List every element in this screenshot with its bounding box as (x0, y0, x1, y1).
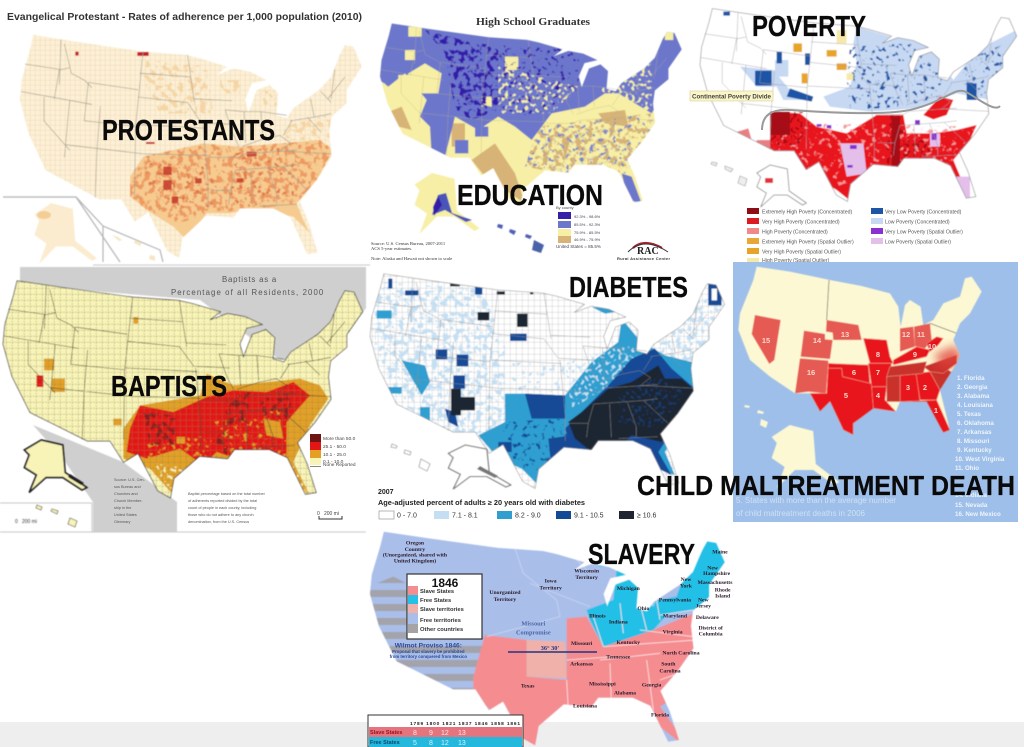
state ranking list: 8. Missouri (957, 438, 990, 445)
state ranking list: 9. Kentucky (957, 447, 992, 454)
note: right text block: denomination, from the U.S. Census (188, 520, 249, 524)
state ranking list: 4. Louisiana (957, 402, 993, 409)
map labels: Virginia (663, 629, 683, 635)
panel: baptists (0, 265, 370, 532)
state rank numbers: 13 (841, 330, 849, 339)
state rank numbers: 15 (762, 336, 770, 345)
map labels: Missouri (521, 620, 546, 627)
legend: diabetes classes: ≥ 10.6 (637, 512, 657, 520)
legend: education quartiles: United States = 85.5% (556, 244, 601, 249)
map labels: Territory (575, 575, 598, 581)
table: state counts by year: 12 (441, 740, 449, 747)
map labels: Michigan (617, 586, 641, 592)
legend: baptist percentages: 25.1 - 50.0 (323, 444, 346, 450)
map labels: New (698, 598, 710, 604)
state rank numbers: 11 (917, 330, 925, 339)
state rank numbers: 12 (902, 330, 910, 339)
note: right text block: those who do not adhere to any church (188, 513, 254, 517)
state rank numbers: 5 (844, 391, 848, 400)
legend: education quartiles: By county (556, 205, 574, 210)
label: education: EDUCATION (457, 180, 603, 212)
note: wilmot proviso: from territory conquered from Mexico (390, 654, 467, 659)
note: left text block (114, 478, 146, 524)
legend: poverty categories: Extremely High Poverty (Concentrated) (762, 210, 853, 216)
map labels: New (681, 577, 692, 583)
note: left text block: ship in the (114, 506, 131, 510)
table: state counts by year: 9 (429, 730, 433, 737)
map labels: Hampshire (703, 571, 731, 577)
label: slavery: SLAVERY (588, 539, 695, 571)
legend: poverty categories: Very Low Poverty (Spatial Outlier) (885, 230, 963, 236)
map labels: Alabama (614, 690, 636, 696)
map labels: Indiana (609, 619, 628, 625)
map labels: Country (405, 547, 425, 553)
line: missouri compromise 36 30 (508, 651, 597, 653)
legend: 1846: 1846 (432, 576, 459, 590)
note: left text block: Churches and (114, 492, 138, 496)
table: state counts by year: Slave States (370, 730, 402, 736)
map title: baptists as a percentage: Baptists as a (222, 275, 277, 284)
note: left text block: sus Bureau and (114, 485, 141, 489)
note: wilmot proviso: Proposal that slavery be prohibited (392, 649, 465, 654)
inset: alaska and hawaii (391, 444, 511, 489)
map labels: Compromise (516, 629, 551, 636)
caption: of child maltreatment deaths in 2006 (736, 509, 866, 518)
map: baptists percentage (2, 280, 364, 499)
map labels: Tennessee (606, 655, 631, 661)
legend: diabetes classes (379, 511, 657, 520)
legend: poverty categories: Extremely High Poverty (Spatial Outlier) (762, 240, 854, 246)
map title: baptists as a percentage: Percentage of all Residents, 2000 (171, 288, 324, 297)
legend: baptist percentages: 0.1 - 10.0 (323, 459, 344, 465)
map labels: North Carolina (662, 650, 700, 656)
scale bar: 0 200 mi (317, 511, 339, 517)
state ranking list: 3. Alabama (957, 393, 990, 400)
state rank numbers: 1 (934, 406, 938, 415)
state ranking list: 5. Texas (957, 411, 982, 418)
map labels: New (707, 566, 719, 572)
map labels: Delaware (696, 615, 719, 621)
table: state counts by year: 8 (429, 740, 433, 747)
map labels: Ohio (637, 606, 649, 612)
logo: rural assistance center: Rural Assistance Center (617, 256, 670, 261)
legend: poverty categories: Very High Poverty (Spatial Outlier) (762, 250, 841, 256)
logo: rural assistance center (617, 243, 670, 261)
map labels: Kentucky (617, 640, 640, 646)
legend: year: 2007 (378, 489, 394, 496)
note: right text block: of adherents reported divided by the total (188, 499, 257, 503)
map labels: Georgia (642, 683, 662, 689)
map: diabetes prevalence (365, 265, 730, 495)
state ranking list: 11. Ohio (955, 465, 979, 472)
map title: high school graduates: High School Graduates (476, 17, 590, 28)
map labels: Wisconsin (574, 568, 600, 574)
legend: 1846: Slave territories (420, 607, 464, 613)
map: high school graduates (375, 20, 688, 205)
table: state counts by year (368, 715, 523, 747)
map: child maltreatment (738, 267, 982, 435)
table: state counts by year: 1789 1800 1821 1837 1846 1858 1861 (410, 721, 520, 727)
state rank numbers: 16 (807, 368, 815, 377)
label: protestants: PROTESTANTS (102, 115, 275, 147)
legend: 1846: Free territories (420, 618, 461, 624)
legend: 1846: Free States (420, 598, 451, 604)
map labels: South (661, 662, 676, 668)
state rank numbers: 3 (906, 383, 910, 392)
state rank numbers: 6 (852, 368, 856, 377)
state ranking list: 7. Arkansas (957, 429, 992, 436)
bottom grey strip (0, 722, 1024, 747)
state rank numbers: 14 (813, 336, 822, 345)
legend: poverty categories: Very Low Poverty (Concentrated) (885, 210, 962, 216)
legend: education quartiles: 85.5% - 92.3% (574, 222, 601, 227)
inset: alaska and hawaii (711, 162, 806, 207)
map labels: Florida (651, 712, 669, 718)
legend: baptist percentages: None Reported (323, 462, 356, 468)
map labels: Massachusetts (698, 580, 733, 586)
legend: education quartiles: 75.9% - 85.5% (574, 230, 601, 235)
state rank numbers: 10 (928, 342, 936, 351)
inset: alaska and hawaii (3, 197, 163, 264)
note: wilmot proviso: Wilmot Proviso 1846: (395, 642, 462, 649)
label: diabetes: DIABETES (569, 272, 688, 304)
note: right text block: count of people in each county, including (188, 506, 256, 510)
panel: education (371, 17, 688, 261)
legend: education quartiles: 92.3% - 98.6% (574, 214, 601, 219)
legend: baptist percentages (310, 434, 356, 468)
legend: diabetes classes: 9.1 - 10.5 (574, 512, 604, 520)
panel: protestants (0, 12, 370, 265)
note: left text block: Source: U.S. Cen- (114, 478, 146, 482)
state ranking list: 15. Nevada (955, 502, 988, 509)
map title: evangelical protestant: Evangelical Protestant - Rates of adherence per 1,000 population (2010) (7, 12, 362, 23)
note: left text block: United States (114, 513, 137, 517)
state rank numbers: 4 (876, 391, 881, 400)
label: poverty: POVERTY (752, 11, 866, 43)
state ranking list: 14. Indiana (955, 492, 988, 499)
map labels: Louisiana (573, 703, 597, 709)
state rank numbers: 8 (876, 350, 880, 359)
map labels: Island (715, 593, 731, 599)
legend: baptist percentages: More than 50.0 (323, 436, 356, 442)
source note: ACS 5-year estimates. (371, 246, 412, 251)
map labels: Territory (494, 597, 516, 603)
note: wilmot proviso (390, 642, 467, 659)
state ranking list (955, 375, 1005, 518)
inset: alaska and hawaii (15, 440, 87, 527)
map labels: Jersey (696, 603, 711, 609)
map labels: Illinois (589, 613, 606, 619)
map labels: Rhode (715, 588, 731, 594)
note: left text block: Glenmary (114, 520, 131, 524)
legend: poverty categories: Very High Poverty (Concentrated) (762, 220, 840, 226)
state rank numbers (762, 330, 938, 415)
label: baptists: BAPTISTS (111, 371, 227, 403)
map labels: Mississippi (589, 681, 616, 687)
scale bar (317, 511, 342, 519)
map labels: York (680, 583, 693, 589)
source note: Note: Alaska and Hawaii not shown to scale (371, 256, 452, 261)
source note (371, 241, 452, 261)
map labels: District of (698, 626, 723, 632)
map labels: United Kingdom) (394, 557, 436, 564)
map labels: Oregon (406, 540, 425, 546)
panel: slavery (360, 527, 733, 747)
legend: diabetes classes: 8.2 - 9.0 (515, 512, 541, 520)
panel background (733, 262, 1018, 522)
map labels: Carolina (659, 668, 681, 674)
legend: diabetes classes: 0 - 7.0 (397, 512, 417, 520)
table: state counts by year: 13 (458, 740, 466, 747)
callout: continental poverty divide (690, 91, 773, 101)
logo: rural assistance center: RAC (637, 246, 659, 257)
map labels: Maine (712, 549, 728, 555)
caption (736, 496, 896, 518)
inset: alaska and hawaii (744, 405, 839, 488)
state rank numbers: 9 (913, 350, 917, 359)
caption: 5. States with more than the average number (736, 496, 896, 505)
legend: poverty categories (747, 208, 963, 264)
map labels: 36° 30' (541, 645, 559, 652)
source note: Source: U.S. Census Bureau, 2007-2011 (371, 241, 446, 247)
map labels: Pennsylvania (659, 598, 691, 604)
state ranking list: 1. Florida (957, 375, 985, 382)
map labels: Territory (539, 585, 562, 591)
map title: baptists as a percentage (171, 275, 324, 297)
state ranking list: 16. New Mexico (955, 511, 1001, 518)
state ranking list: 10. West Virginia (955, 456, 1005, 463)
table: state counts by year: 5 (413, 740, 417, 747)
map labels: Texas (521, 684, 535, 690)
map labels: Arkansas (570, 662, 594, 668)
legend: education quartiles (556, 205, 601, 249)
map labels (383, 540, 733, 718)
legend: 1846: Other countries (420, 627, 463, 633)
panel: diabetes (365, 265, 730, 520)
legend: 1846 (407, 574, 482, 639)
state rank numbers: 7 (876, 368, 880, 377)
inset: alaska and hawaii: 0 200 mi (15, 519, 37, 525)
legend: poverty categories: High Poverty (Concentrated) (762, 230, 828, 236)
map labels: (Unorganized, shared with (383, 552, 448, 559)
state ranking list: 2. Georgia (957, 384, 988, 391)
legend: diabetes classes: 7.1 - 8.1 (452, 512, 478, 520)
map labels: Missouri (571, 641, 593, 647)
legend: 1846: Slave States (420, 589, 454, 595)
state rank numbers: 2 (923, 383, 927, 392)
note: right text block (188, 492, 266, 524)
legend: education quartiles: 46.9% - 75.9% (574, 237, 601, 242)
table: state counts by year: 12 (441, 730, 449, 737)
map labels: Maryland (663, 614, 688, 620)
map: slave and free states 1846 (360, 527, 733, 747)
table: state counts by year: 13 (458, 730, 466, 737)
panel: poverty (690, 9, 1017, 264)
callout: continental poverty divide: Continental Poverty Divide (692, 94, 772, 100)
table: state counts by year: Free States (370, 740, 400, 746)
table: state counts by year: 8 (413, 730, 417, 737)
legend: poverty categories: High Poverty (Spatial Outlier) (762, 258, 829, 264)
note: right text block: Baptist percentage based on the total number (188, 492, 266, 496)
map labels: Iowa (545, 579, 557, 585)
legend: poverty categories: Low Poverty (Spatial Outlier) (885, 240, 951, 246)
inset: alaska and hawaii (414, 173, 544, 253)
legend: baptist percentages: 10.1 - 25.0 (323, 452, 346, 458)
map: poverty (700, 9, 1017, 203)
legend: poverty categories: Low Poverty (Concentrated) (885, 220, 950, 226)
map labels: Columbia (699, 632, 723, 638)
map labels: Unorganized (489, 590, 521, 596)
legend: caption: Age-adjusted percent of adults ≥ 20 years old with diabetes (378, 500, 585, 507)
map backdrop: canada and mexico (0, 265, 370, 532)
panel: child maltreatment death (637, 262, 1018, 522)
map: protestant adherence (20, 34, 362, 258)
note: left text block: Church Member- (114, 499, 143, 503)
arrow: continental poverty divide line (762, 91, 1000, 130)
state ranking list: 6. Oklahoma (957, 420, 994, 427)
